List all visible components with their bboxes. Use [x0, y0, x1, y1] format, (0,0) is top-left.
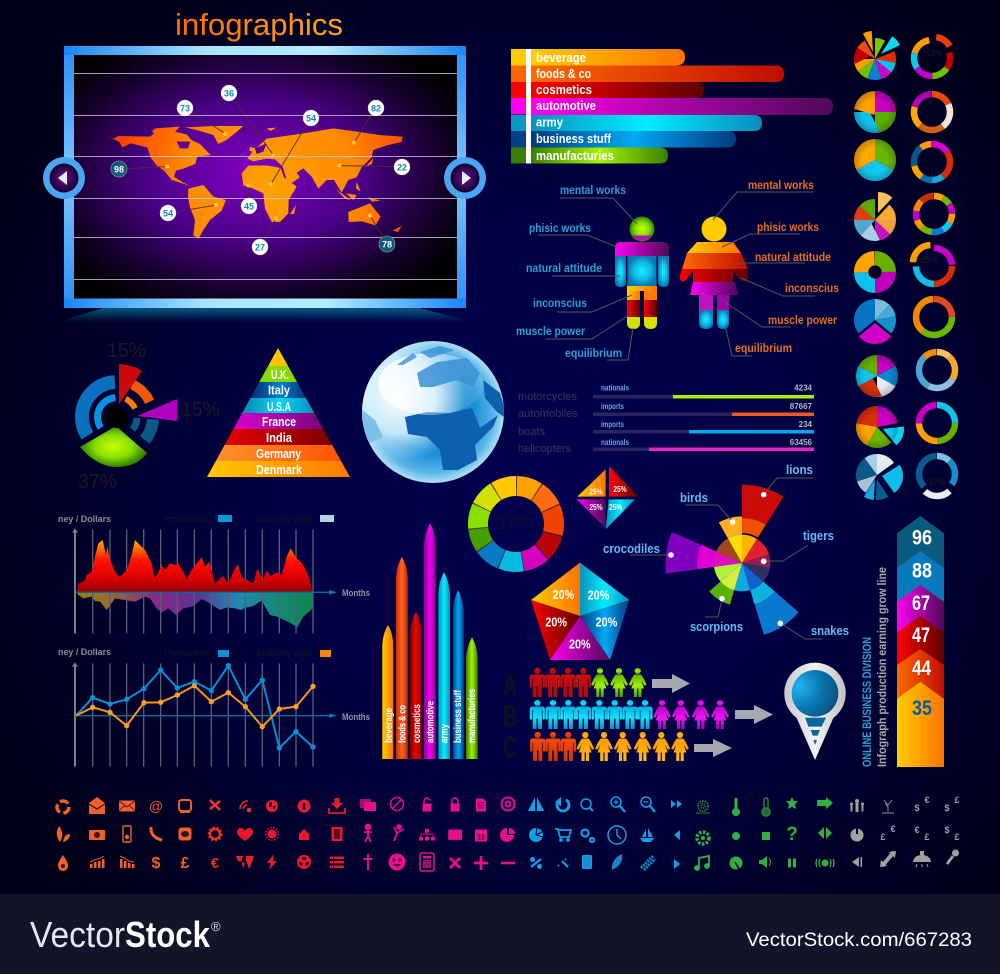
icon row 1	[57, 795, 960, 816]
crayon bar chart: beverage	[384, 708, 395, 743]
icon: tree	[696, 801, 710, 813]
vertical side captions: ONLINE BUSINESS DIVISION	[860, 637, 874, 767]
map value badges: 45	[244, 202, 254, 212]
icon: folder	[448, 830, 462, 840]
icon: thermometer outline	[762, 798, 770, 816]
icon: speaker	[759, 856, 770, 868]
progress bars panel: helicopters	[518, 443, 571, 455]
row C	[503, 731, 732, 764]
pie 6	[864, 310, 886, 334]
rose chart: crocodiles	[603, 541, 660, 556]
icon: sitemap	[419, 829, 435, 840]
area chart: Industry Gain	[257, 514, 313, 524]
icon: gears	[582, 830, 594, 842]
icon: dollar euro: €	[924, 795, 930, 805]
male figure with labels: phisic works	[529, 221, 591, 235]
icon: calendar: 15	[477, 834, 485, 842]
icon: at sign: @	[149, 798, 163, 814]
icon: world map	[236, 856, 254, 869]
icon: plane	[210, 800, 220, 810]
icon: pound euro: €	[890, 824, 896, 834]
progress bars panel: imports	[601, 420, 624, 429]
male figure	[615, 216, 669, 329]
world map	[107, 126, 403, 239]
crayon bar chart: cosmetics	[412, 704, 423, 743]
footer logo: Stock	[125, 914, 211, 955]
pictogram rows	[503, 668, 773, 764]
female figure with labels: equilibrium	[735, 341, 792, 355]
line chart	[58, 647, 370, 767]
chevron growth column: 44	[912, 657, 931, 680]
icon: dollar pound swap	[944, 825, 960, 842]
rose chart	[603, 462, 849, 639]
icon: lightning	[267, 854, 277, 870]
icon: tools	[558, 859, 568, 867]
horizontal category bars: automotive	[536, 98, 596, 113]
icon: pie	[500, 828, 515, 842]
progress bars panel: 63456	[790, 438, 813, 447]
map value badges: 98	[114, 164, 124, 174]
horizontal category bars: foods & co	[536, 66, 591, 81]
country pyramid: Italy	[268, 382, 291, 398]
icon: pound euro	[880, 824, 896, 842]
icon: clock	[608, 826, 626, 844]
icon: refresh	[555, 797, 571, 813]
horizontal category bars	[511, 49, 833, 164]
map value badges: 78	[382, 240, 392, 250]
progress bars panel: nationals	[601, 384, 629, 392]
donut 6	[916, 299, 952, 335]
icon: people	[850, 799, 864, 812]
vertical side captions: Infograph production earning grow line	[875, 567, 889, 767]
icon: euro pound: €	[914, 825, 920, 835]
icon: drop	[58, 855, 68, 871]
pie 2	[864, 102, 886, 122]
row B: B	[503, 700, 517, 733]
icon: document	[476, 798, 486, 812]
donut 3	[914, 144, 950, 180]
rose chart: tigers	[803, 528, 834, 543]
icon: leaves	[57, 826, 70, 842]
progress bars panel: 234	[799, 420, 813, 429]
exploded radial chart: 15%	[107, 340, 146, 362]
icon: camera	[89, 830, 105, 840]
male figure with labels: mental works	[560, 183, 626, 197]
country pyramid: U.S.A	[267, 399, 291, 414]
icon: radiation	[297, 855, 311, 869]
icon: calculator	[420, 853, 434, 871]
progress bars panel: imports	[601, 402, 624, 411]
row C: C	[503, 731, 517, 764]
icon: dollar pound: £	[954, 795, 960, 805]
progress bars panel: nationals	[601, 438, 629, 447]
area chart: Months	[342, 588, 370, 599]
male figure with labels: equilibrium	[565, 346, 622, 360]
donut 4	[916, 196, 952, 232]
country pyramid: U.K.	[271, 367, 289, 382]
female figure with labels: phisic works	[757, 220, 819, 234]
icon: cross	[364, 854, 372, 870]
map value badges: 27	[255, 242, 265, 252]
icon: left right arrows	[818, 827, 832, 839]
segmented donut 37%	[478, 486, 554, 562]
female figure with labels: muscle power	[768, 313, 837, 327]
female figure with labels: mental works	[748, 178, 814, 192]
country pyramid: Denmark	[256, 462, 303, 477]
chevron growth column: 88	[912, 560, 932, 582]
donut 2	[914, 94, 950, 130]
panel: world map slider	[43, 46, 486, 322]
donut chart column	[913, 37, 955, 496]
icon: pie slices	[529, 828, 543, 842]
icon: calendar	[475, 830, 487, 842]
icon: power	[850, 828, 864, 842]
icon: dollar pound swap: £	[954, 832, 960, 842]
icon: dollar euro	[914, 795, 930, 813]
horizontal category bars: beverage	[536, 50, 586, 65]
icon: star	[786, 797, 798, 809]
icon: music note	[695, 856, 709, 870]
donut percentages	[921, 48, 945, 488]
pentagon chart: 20%	[588, 589, 609, 603]
map leader lines	[119, 93, 402, 247]
segmented donut 37%: 37%	[495, 513, 533, 535]
previous button	[43, 157, 85, 199]
icon: recycle	[57, 801, 69, 813]
donut percentages: 16%	[927, 48, 942, 59]
title: infographics	[175, 7, 343, 42]
line chart: Production	[164, 648, 210, 658]
progress bars panel: motorcycles	[518, 391, 577, 403]
globe	[362, 341, 508, 483]
icon: bare tree	[882, 800, 894, 813]
icon: thermometer	[732, 798, 740, 816]
icon: pause	[788, 858, 796, 868]
male figure with labels: inconscius	[533, 296, 587, 310]
progress bars panel: 4234	[794, 384, 813, 392]
horizontal category bars: army	[536, 114, 564, 130]
icon: jar	[582, 856, 592, 868]
crayon bar chart: automotive	[426, 701, 436, 743]
pie 3	[864, 150, 886, 170]
icon: chat	[178, 828, 192, 840]
quarter diamond: 25%	[609, 502, 623, 512]
pentagon chart	[531, 563, 629, 660]
row A	[503, 668, 690, 702]
chevron growth column: 47	[912, 624, 930, 647]
icon: heart	[237, 828, 253, 841]
quarter diamond	[577, 466, 638, 529]
icon: brick grid	[641, 856, 655, 870]
horizontal category bars: business stuff	[536, 131, 612, 146]
rose chart: birds	[680, 490, 708, 505]
icon: broadcast	[816, 859, 834, 867]
donut 8	[919, 405, 955, 441]
rose chart: snakes	[811, 623, 849, 638]
icon: target	[502, 798, 514, 810]
icon: flower	[697, 832, 709, 844]
icon: euro: €	[211, 855, 220, 872]
icon: multiply	[450, 858, 460, 868]
crayon bar chart: foods & co	[398, 705, 408, 743]
donut 7	[919, 352, 955, 388]
country pyramid: India	[266, 430, 293, 445]
footer image id: VectorStock.com/667283	[746, 930, 972, 951]
icon: sun	[266, 828, 278, 840]
exploded radial chart	[78, 340, 220, 493]
row A: A	[503, 669, 517, 702]
icon: euro pound	[914, 825, 930, 842]
icon: download	[329, 798, 345, 813]
icon: triangle left	[674, 830, 680, 840]
icon: dollar pound swap: $	[944, 825, 950, 835]
icon: triangle right	[674, 859, 680, 869]
country pyramid: France	[262, 414, 296, 429]
icon: resize	[880, 851, 896, 867]
icon: arrow	[817, 797, 833, 809]
pie 7	[866, 366, 888, 386]
icon: lamp	[913, 851, 931, 867]
icon: dot	[732, 832, 740, 840]
female figure with labels: inconscius	[785, 281, 839, 295]
female leader lines	[713, 192, 815, 356]
icon: home	[299, 829, 309, 840]
chevron growth column	[897, 516, 944, 767]
pie 9	[864, 464, 892, 490]
icon: sails	[528, 797, 544, 811]
icon: pound euro: £	[880, 832, 886, 842]
map value badges: 36	[224, 88, 234, 98]
footer logo	[30, 914, 221, 955]
rose chart: scorpions	[690, 619, 743, 634]
donut percentages: 25%	[921, 255, 938, 266]
map value badges: 54	[306, 114, 316, 124]
country pyramid: Germany	[256, 446, 302, 461]
line chart: ney / Dollars	[58, 647, 111, 657]
icon: back	[852, 857, 862, 867]
quarter diamond: 25%	[613, 484, 627, 494]
icon: globe	[266, 800, 278, 812]
icon: zoom out	[641, 797, 655, 812]
icon: info	[298, 800, 310, 812]
quarter diamond: 25%	[589, 487, 603, 497]
icon: phone	[151, 827, 162, 840]
quarter diamond: 25%	[589, 502, 603, 512]
line chart: Industry Gain	[257, 648, 313, 658]
crayon bar chart: business stuff	[453, 689, 464, 743]
icon: dancing figure	[394, 825, 404, 841]
icon: disc	[730, 856, 742, 870]
male figure with labels: muscle power	[516, 324, 585, 338]
icon: rss	[240, 801, 250, 812]
icon: cart	[555, 829, 571, 841]
female figure with labels	[680, 178, 839, 356]
male leader lines	[538, 198, 637, 360]
area chart: Production	[164, 514, 210, 524]
crayon bar chart: army	[440, 724, 450, 743]
icon: boat	[640, 828, 654, 842]
icon: pound: £	[181, 855, 190, 872]
icon: zoom in	[611, 797, 625, 812]
icon: chart up	[90, 856, 104, 868]
icon: chart down	[120, 856, 134, 868]
icon: documents	[360, 799, 376, 811]
icon: person	[364, 824, 372, 842]
footer logo: Vector	[30, 914, 125, 955]
donut 9	[919, 456, 955, 496]
icon row 2	[57, 824, 960, 845]
male figure with labels: natural attitude	[526, 261, 602, 275]
icon: fast forward	[671, 800, 682, 808]
icon: unlocked	[422, 798, 432, 812]
exploded radial chart: 15%	[181, 399, 220, 421]
line chart: Months	[342, 712, 370, 723]
icon: search	[581, 799, 593, 811]
chevron growth column: 67	[912, 592, 930, 615]
donut percentages: 37%	[929, 477, 945, 488]
area chart	[58, 514, 370, 633]
pie 5 with hole	[861, 258, 889, 286]
icon: dollar: $	[152, 855, 161, 872]
progress bars panel	[518, 384, 814, 455]
row B	[503, 700, 773, 733]
icon row 3	[58, 850, 959, 872]
male figure with labels	[516, 183, 669, 360]
icon: dollar pound	[944, 795, 960, 813]
next button	[444, 157, 486, 199]
area chart: ney / Dollars	[58, 514, 111, 524]
crayon bar chart: manufacturies	[467, 689, 478, 743]
icon: lock	[450, 798, 460, 812]
female figure with labels: natural attitude	[755, 250, 831, 264]
pentagon chart: 20%	[569, 638, 591, 652]
progress bars panel: boats	[518, 426, 545, 438]
icon: open envelope	[89, 797, 105, 814]
rose chart: lions	[786, 462, 813, 477]
icon: euro pound: £	[924, 832, 930, 842]
icon: percent	[530, 857, 542, 869]
map value badges: 22	[397, 162, 407, 172]
donut 5	[913, 245, 952, 284]
icon: microphone	[947, 850, 959, 864]
icon: leaf	[612, 854, 622, 870]
icon: plus	[474, 856, 488, 870]
vertical side captions	[860, 567, 889, 767]
icon: stop	[762, 832, 770, 840]
icon: envelope	[119, 800, 135, 812]
pie 1	[862, 42, 892, 70]
progress bars panel: 87667	[790, 402, 813, 411]
map value badges: 54	[163, 208, 173, 218]
pentagon chart: 20%	[596, 615, 617, 629]
icon: gear	[208, 828, 222, 840]
horizontal category bars: manufacturies	[536, 148, 614, 163]
chevron growth column: 96	[912, 526, 932, 550]
donut 1	[914, 37, 952, 76]
icon: film	[332, 827, 342, 841]
map pin	[784, 663, 846, 760]
icon: dollar pound: $	[944, 803, 950, 813]
map value badges: 82	[371, 104, 381, 114]
country pyramid	[207, 348, 350, 477]
horizontal category bars: cosmetics	[536, 82, 592, 97]
exploded radial chart: 37%	[78, 471, 117, 493]
pie chart column	[854, 42, 898, 490]
icon: forbidden	[390, 798, 404, 810]
map value badges: 73	[180, 104, 190, 114]
icon: music player	[123, 826, 131, 842]
pentagon chart: 20%	[553, 588, 574, 602]
progress bars panel: automobiles	[518, 408, 578, 420]
icon: question: ?	[786, 824, 798, 845]
footer bar	[0, 894, 1000, 974]
footer logo: ®	[211, 919, 221, 934]
icon: dollar euro: $	[914, 803, 920, 813]
icon: list	[330, 856, 344, 868]
pie 8	[866, 416, 894, 440]
female figure	[680, 216, 748, 329]
crayon bar chart	[382, 523, 478, 759]
pentagon chart: 20%	[545, 615, 567, 629]
icon grid	[57, 795, 960, 872]
icon: minus	[501, 862, 515, 864]
chevron growth column: 35	[912, 697, 932, 720]
icon: smiley	[388, 854, 406, 870]
pie 4	[864, 202, 888, 230]
icon: tv	[179, 800, 191, 812]
map value badges	[114, 88, 407, 252]
